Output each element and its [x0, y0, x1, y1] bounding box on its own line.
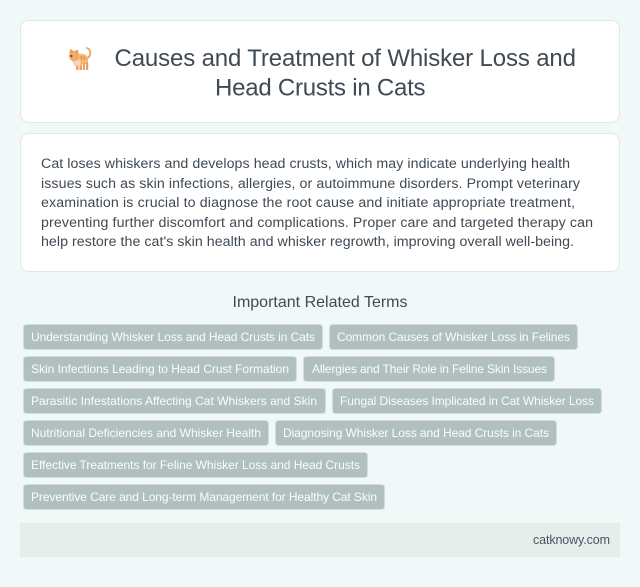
- tag: Understanding Whisker Loss and Head Crusts in Cats: [31, 330, 315, 344]
- tag: [330, 324, 578, 350]
- related terms tags: [24, 324, 602, 510]
- title panel: [20, 20, 620, 122]
- summary text: issues such as skin infections, allergies, or autoimmune disorders. Prompt veterinary: [41, 176, 581, 192]
- tag: [24, 356, 296, 382]
- summary text: Cat loses whiskers and develops head crusts, which may indicate underlying health: [41, 156, 570, 172]
- tag: Parasitic Infestations Affecting Cat Whiskers and Skin: [31, 394, 317, 408]
- tag: Diagnosing Whisker Loss and Head Crusts in Cats: [283, 426, 549, 440]
- tag: Preventive Care and Long-term Management for Healthy Cat Skin: [31, 490, 377, 504]
- related terms heading: Important Related Terms: [232, 294, 408, 311]
- tag: [24, 484, 384, 510]
- tag: [24, 324, 322, 350]
- tag: [24, 388, 326, 414]
- tag: [24, 452, 368, 478]
- heading: Head Crusts in Cats: [215, 74, 426, 102]
- tag: Nutritional Deficiencies and Whisker Health: [31, 426, 261, 440]
- summary text: examination is crucial to diagnose the root cause and initiate appropriate treatment,: [41, 195, 575, 211]
- footer: [20, 523, 620, 557]
- tag: [304, 356, 554, 382]
- tag: [332, 388, 602, 414]
- tag: Allergies and Their Role in Feline Skin Issues: [312, 362, 547, 376]
- tag: [24, 420, 268, 446]
- tag: Skin Infections Leading to Head Crust Formation: [31, 362, 289, 376]
- tag: Fungal Diseases Implicated in Cat Whisker Loss: [340, 394, 594, 408]
- tag: Effective Treatments for Feline Whisker Loss and Head Crusts: [31, 458, 360, 472]
- icon: cat: [69, 48, 90, 70]
- tag: [276, 420, 556, 446]
- summary text: preventing further discomfort and complications. Proper care and targeted therapy can: [41, 215, 593, 231]
- tag: Common Causes of Whisker Loss in Felines: [337, 330, 570, 344]
- heading: Causes and Treatment of Whisker Loss and: [114, 45, 576, 72]
- summary text: help restore the cat's skin health and whisker regrowth, improving overall well-being.: [41, 234, 574, 250]
- summary panel: [20, 134, 620, 272]
- heading: [114, 45, 576, 102]
- summary text: [41, 156, 593, 250]
- footer site name: catknowy.com: [533, 533, 610, 547]
